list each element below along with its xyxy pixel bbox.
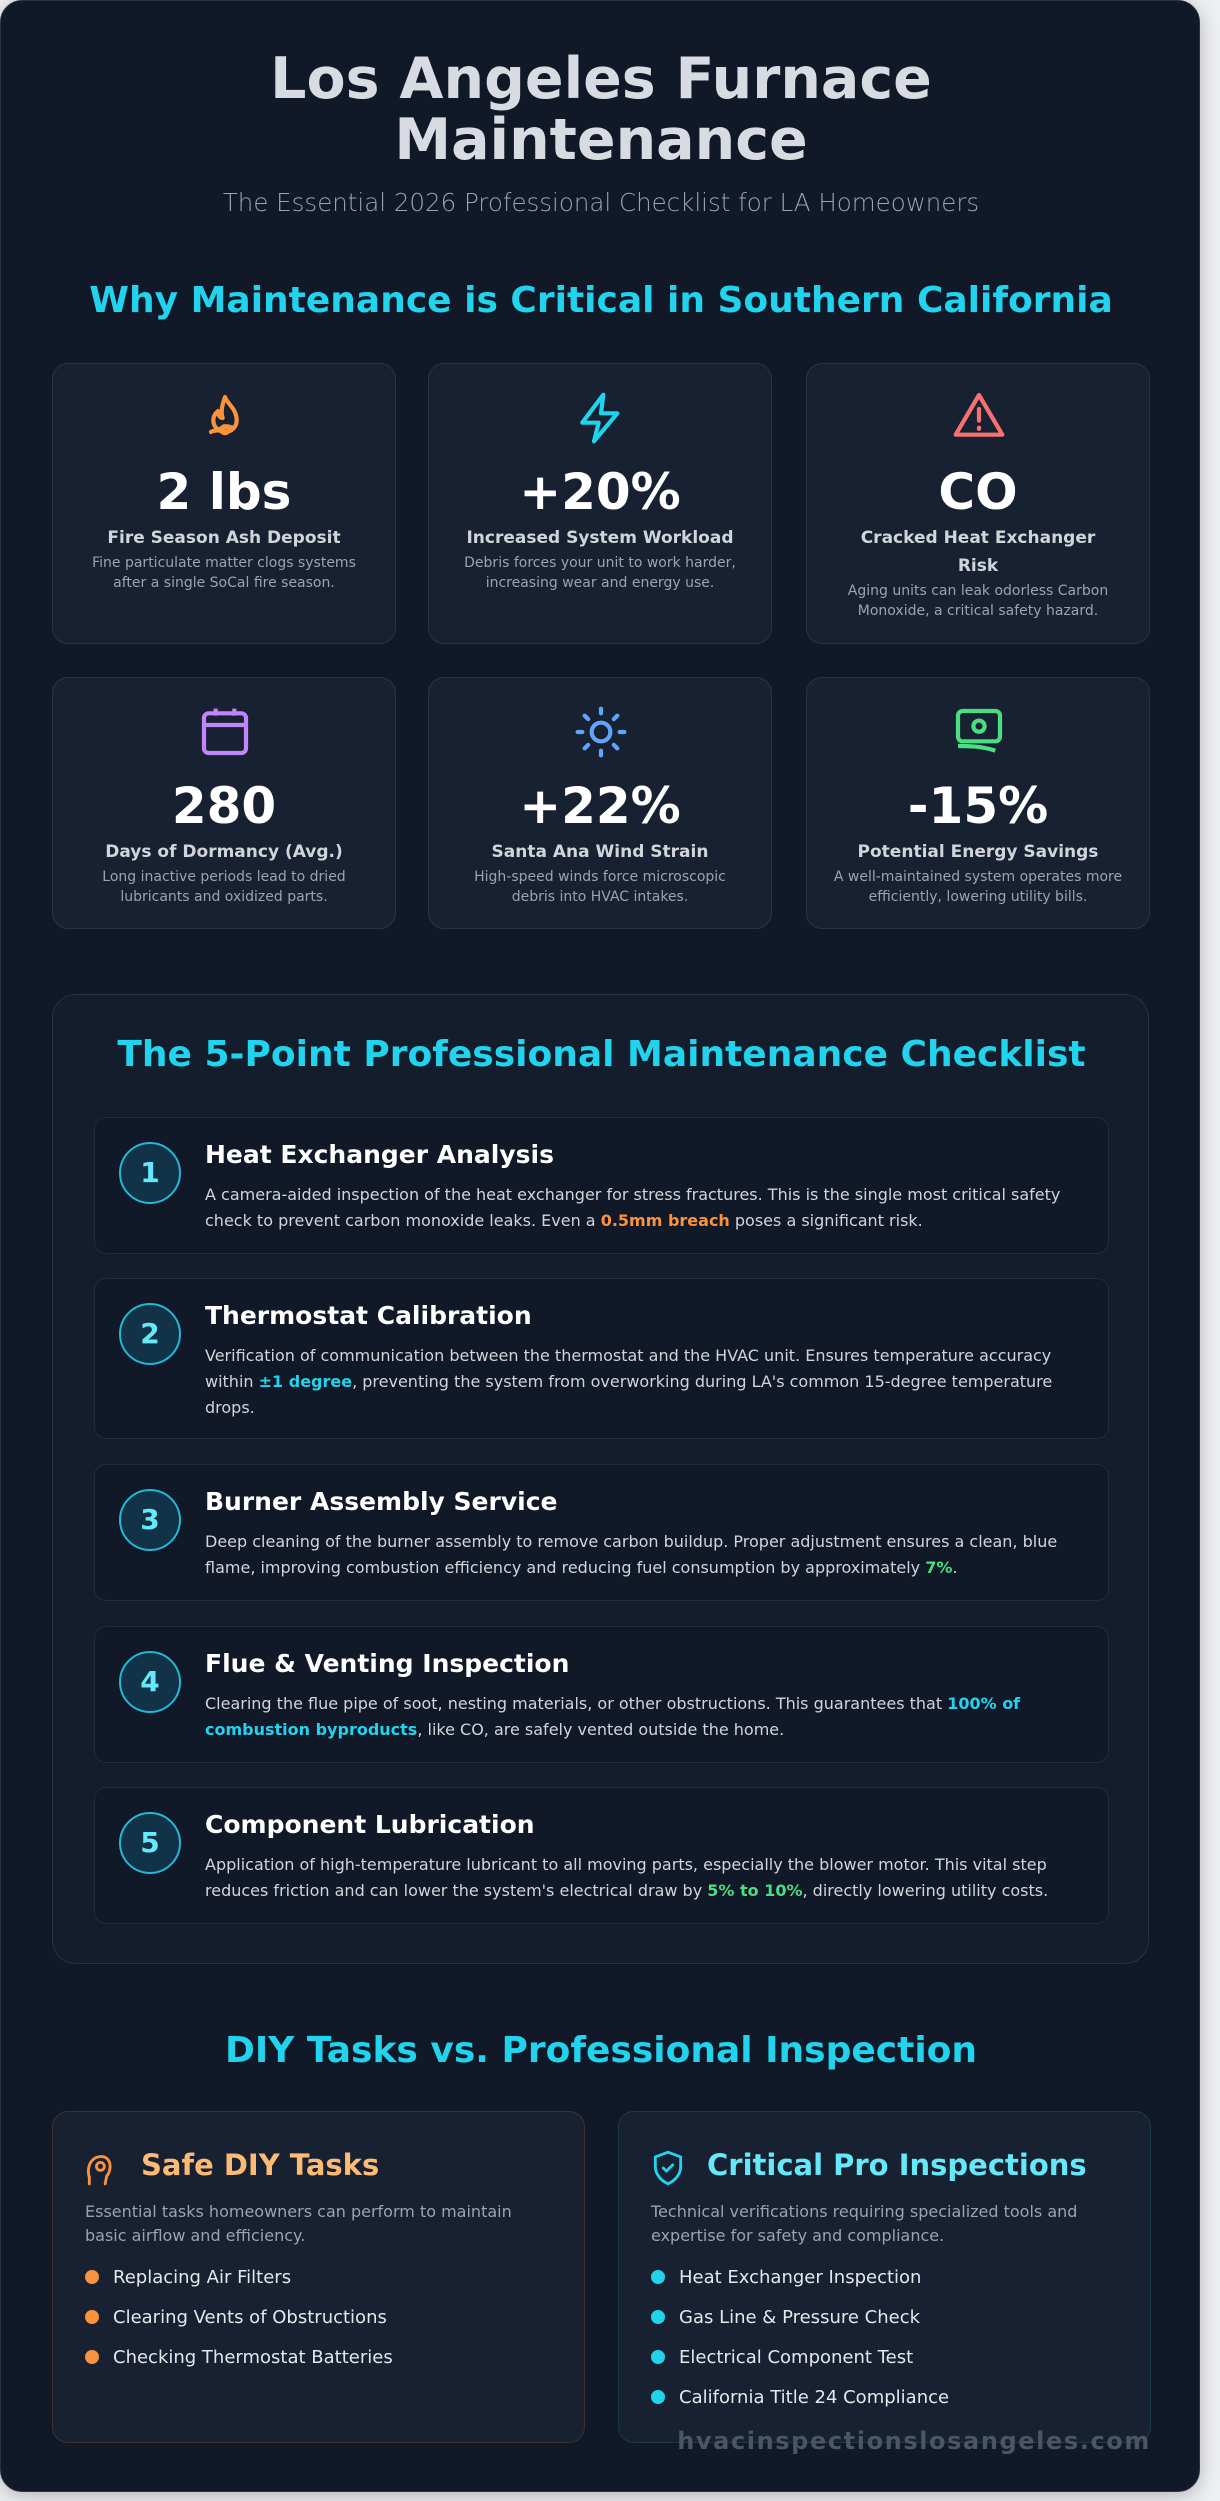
stat card: dormancy — [52, 677, 396, 929]
item 3 — [94, 1464, 1109, 1601]
icon: flame — [208, 394, 239, 436]
item 3: Burner Assembly Service — [205, 1487, 557, 1516]
item 4 — [94, 1626, 1109, 1763]
stat card: wind — [428, 677, 772, 929]
item 1 — [94, 1117, 1109, 1254]
stat card: dormancy: Long inactive periods lead to dried lubricants and oxidized parts. — [102, 869, 346, 905]
stat card: ash: Fine particulate matter clogs systems after a single SoCal fire season. — [92, 555, 356, 591]
icon: shield — [654, 2150, 682, 2186]
stat card: wind: Santa Ana Wind Strain — [492, 842, 708, 862]
card: DIY: Checking Thermostat Batteries — [113, 2347, 393, 2368]
icon: bolt — [580, 392, 620, 444]
stat card: CO — [806, 363, 1150, 644]
title — [270, 46, 932, 173]
item 1: A camera-aided inspection of the heat exchanger for stress fractures. This is the single most critical safety check to prevent carbon monoxide leaks. Even a 0.5mm breach poses a significant risk. — [205, 1185, 1060, 1230]
stat card: workload: Debris forces your unit to work harder, increasing wear and energy use. — [464, 555, 736, 591]
item 2: Verification of communication between the thermostat and the HVAC unit. Ensures temperature accuracy within ±1 degree, preventing the system from overworking during LA's common 15-degree temperature drops. — [205, 1346, 1052, 1417]
icon: hand — [86, 2155, 112, 2186]
card: DIY: Replacing Air Filters — [113, 2267, 291, 2288]
item 4: Clearing the flue pipe of soot, nesting materials, or other obstructions. This guarantees that 100% of combustion byproducts, like CO, are safely vented outside the home. — [205, 1694, 1020, 1739]
item 5 — [94, 1787, 1109, 1924]
icon: sun — [576, 706, 626, 758]
stat card: wind: +22% — [519, 777, 681, 835]
item 2: Thermostat Calibration — [205, 1301, 532, 1330]
stat card: savings: Potential Energy Savings — [858, 842, 1098, 862]
stat card: dormancy: 280 — [172, 777, 276, 835]
heading: checklist: The 5-Point Professional Maintenance Checklist — [117, 1034, 1086, 1075]
item 5: Component Lubrication — [205, 1810, 535, 1839]
stat card: savings: -15% — [908, 777, 1048, 835]
item 3: 3 — [140, 1503, 160, 1536]
stat card: dormancy: Days of Dormancy (Avg.) — [105, 842, 343, 862]
card: DIY — [52, 2111, 585, 2443]
heading: DIY vs pro: DIY Tasks vs. Professional Inspection — [225, 2030, 977, 2071]
stat card: workload: +20% — [519, 463, 681, 521]
stat card: workload — [428, 363, 772, 644]
stat card: savings — [806, 677, 1150, 929]
icon: money — [956, 708, 1002, 753]
stat card: wind: High-speed winds force microscopic debris into HVAC intakes. — [474, 869, 726, 905]
card: pro: Critical Pro Inspections — [707, 2148, 1087, 2182]
item 2 — [94, 1278, 1109, 1439]
stat card: CO: CO — [938, 463, 1018, 521]
item 4: Flue & Venting Inspection — [205, 1649, 569, 1678]
item 5: Application of high-temperature lubricant to all moving parts, especially the blower motor. This vital step reduces friction and can lower the system's electrical draw by 5% to 10%, directly lowering utility costs. — [205, 1855, 1048, 1900]
stat card: savings: A well-maintained system operates more efficiently, lowering utility bills. — [834, 869, 1122, 905]
icon: warning — [954, 392, 1004, 437]
item 5: 5 — [140, 1826, 160, 1859]
item 1: Heat Exchanger Analysis — [205, 1140, 554, 1169]
card: pro: Heat Exchanger Inspection — [679, 2267, 921, 2288]
card: DIY: Clearing Vents of Obstructions — [113, 2307, 387, 2328]
panel: checklist — [52, 994, 1149, 1964]
stat card: ash: Fire Season Ash Deposit — [107, 528, 341, 548]
card: pro — [618, 2111, 1151, 2443]
title: Los Angeles Furnace — [270, 46, 932, 112]
heading: why maintenance: Why Maintenance is Critical in Southern California — [89, 280, 1113, 321]
stat card: CO: Cracked Heat Exchanger Risk — [861, 528, 1095, 576]
watermark: hvacinspectionslosangeles.com — [677, 2427, 1151, 2455]
card: DIY: Essential tasks homeowners can perform to maintain basic airflow and efficiency. — [85, 2202, 512, 2245]
stat card: ash — [52, 363, 396, 644]
card: pro: Gas Line & Pressure Check — [679, 2307, 920, 2328]
item 2: 2 — [140, 1317, 160, 1350]
stat card: ash: 2 lbs — [157, 463, 291, 521]
subtitle: The Essential 2026 Professional Checklist for LA Homeowners — [223, 188, 979, 217]
card: pro: California Title 24 Compliance — [679, 2387, 949, 2408]
stat card: CO: Aging units can leak odorless Carbon Monoxide, a critical safety hazard. — [848, 583, 1108, 619]
card: DIY: Safe DIY Tasks — [141, 2148, 379, 2182]
icon: calendar — [202, 708, 248, 756]
item 1: 1 — [140, 1156, 160, 1189]
item 3: Deep cleaning of the burner assembly to remove carbon buildup. Proper adjustment ensures a clean, blue flame, improving combustion efficiency and reducing fuel consumption by approximately 7%. — [205, 1532, 1057, 1577]
card: pro: Electrical Component Test — [679, 2347, 913, 2368]
stat card: workload: Increased System Workload — [466, 528, 734, 548]
card: pro: Technical verifications requiring specialized tools and expertise for safety and compliance. — [651, 2202, 1077, 2245]
title: Maintenance — [394, 107, 808, 173]
item 4: 4 — [140, 1665, 160, 1698]
